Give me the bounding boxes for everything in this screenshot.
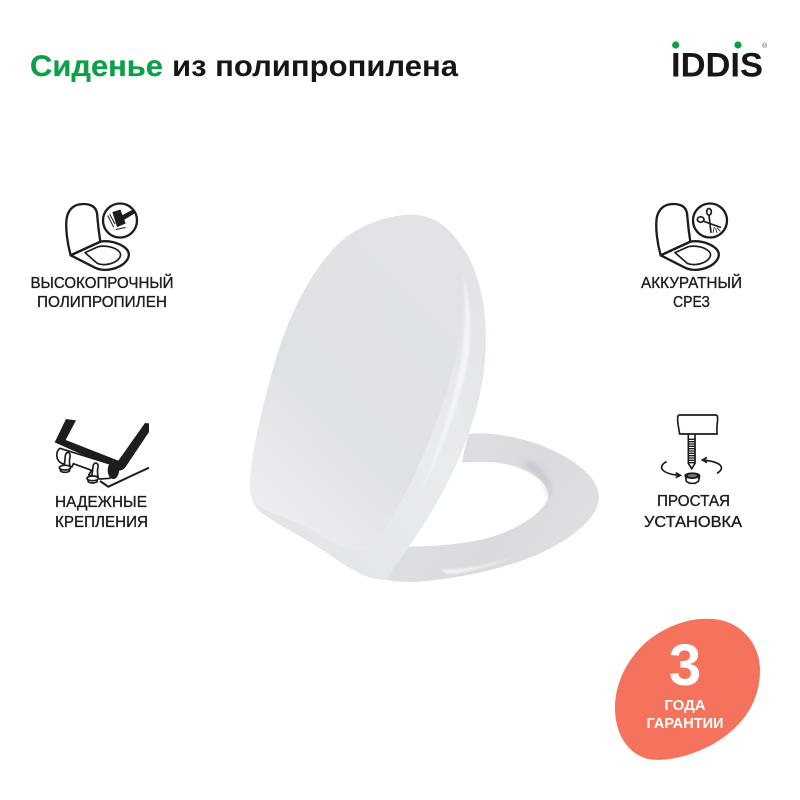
thick lid frame [55,419,149,471]
logo: IDDIS: IDDIS [671,46,763,84]
label: high-strength polypropylene: ПОЛИПРОПИЛЕН [37,294,167,311]
seat ring [385,433,599,582]
warranty text [646,697,724,732]
warranty text: ГАРАНТИИ [646,715,724,732]
label: high-strength polypropylene: ВЫСОКОПРОЧНЫЙ [30,273,174,292]
warranty badge [615,619,760,760]
label: reliable fasteners: НАДЕЖНЫЕ [55,494,147,511]
icon: screw installation [662,415,721,483]
scissors in circle [693,203,727,237]
lid top surface [250,215,464,550]
hammer in circle [103,203,137,237]
label: reliable fasteners [55,494,148,531]
left hinge bolt [59,452,71,472]
label: neat cut [641,273,742,311]
screw shaft [688,434,695,469]
seat ring shadow [520,462,550,500]
lid rim [250,215,486,580]
label: neat cut: АККУРАТНЫЙ [641,273,742,292]
lid and seat outline [66,204,129,270]
rim highlight [420,275,470,493]
title: Сиденье [30,50,163,83]
seat ring highlight [440,557,513,574]
right arrow [702,457,721,473]
hinge cylinder end [108,462,119,479]
number 3: 3 [669,633,701,698]
logo: IDDIS: ® [762,42,768,50]
icon: seat with scissors [656,203,727,270]
base line [100,468,149,487]
label: neat cut: СРЕЗ [673,294,710,311]
label: easy installation: УСТАНОВКА [644,514,742,531]
screw thread [688,439,696,463]
icon: seat with hammer [66,203,137,270]
label: high-strength polypropylene [30,273,174,311]
label: easy installation [644,493,742,531]
label: easy installation: ПРОСТАЯ [657,493,730,510]
mounting block [678,415,718,434]
icon: hinges [55,419,149,487]
label: reliable fasteners: КРЕПЛЕНИЯ [55,514,148,531]
title: из полипропилена [172,50,458,83]
toilet seat product image [250,215,599,582]
lid and seat outline [656,204,719,270]
hinge cylinder [57,448,113,479]
left arrow [662,462,680,478]
badge shape [615,619,760,760]
warranty text: ГОДА [664,697,706,714]
title [30,50,458,83]
nut [686,477,700,483]
right hinge bolt [87,463,98,483]
